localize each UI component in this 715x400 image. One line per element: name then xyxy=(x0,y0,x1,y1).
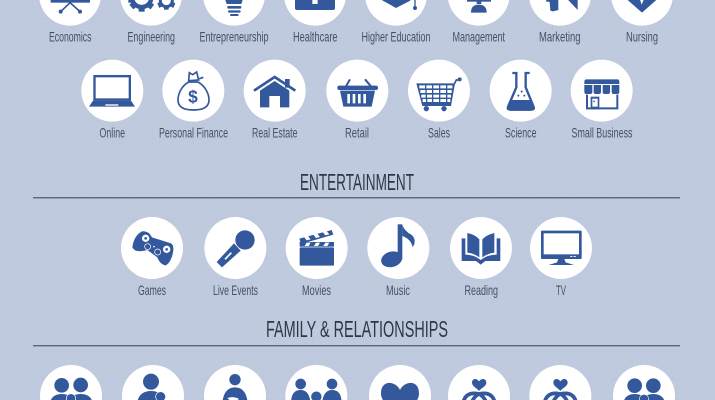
label: Management: Management xyxy=(452,28,505,44)
label: Real Estate: Real Estate xyxy=(252,124,298,140)
icon: Reading open book xyxy=(450,217,512,279)
label: Engineering: Engineering xyxy=(128,28,175,44)
label: Sales: Sales xyxy=(428,124,450,140)
icon: Higher Education cap xyxy=(365,0,427,26)
icon: couple with heart xyxy=(529,365,591,400)
label: Science: Science xyxy=(505,124,537,140)
icon: Personal Finance money bag: $ xyxy=(188,86,198,106)
icon: parents with child xyxy=(613,365,675,400)
label: Nursing: Nursing xyxy=(626,28,658,44)
icon: Retail basket xyxy=(326,60,388,122)
icon: Personal Finance money bag xyxy=(162,60,224,122)
label: Marketing: Marketing xyxy=(539,28,580,44)
icon: Engineering gears xyxy=(120,0,182,26)
label: Games: Games xyxy=(138,282,166,298)
panel: business icons, top row xyxy=(39,0,673,44)
icon: Music note xyxy=(367,217,429,279)
panel: family icons xyxy=(40,365,675,400)
label: Online: Online xyxy=(100,124,125,140)
icon: Online laptop xyxy=(81,60,143,122)
icon: Healthcare case xyxy=(284,0,346,26)
icon: couple with heart xyxy=(448,365,510,400)
icon: TV monitor xyxy=(530,217,592,279)
label: Movies: Movies xyxy=(302,282,331,298)
heading: Family and Relationships: FAMILY & RELATIONSHIPS xyxy=(266,316,448,342)
icon: Live Events microphone xyxy=(204,217,266,279)
icon: Science flask xyxy=(490,60,552,122)
icon: Sales shopping cart xyxy=(408,60,470,122)
label: Entrepreneurship: Entrepreneurship xyxy=(200,28,269,44)
label: Healthcare: Healthcare xyxy=(293,28,338,44)
icon: Marketing megaphone xyxy=(529,0,591,26)
icon: Management person xyxy=(448,0,510,26)
panel: business icons, second row xyxy=(81,60,633,140)
icon: parents with child xyxy=(40,365,102,400)
icon: Games controller xyxy=(121,217,183,279)
heading: Entertainment: ENTERTAINMENT xyxy=(300,169,414,195)
icon: Nursing badge xyxy=(611,0,673,26)
icon: Economics presentation board xyxy=(39,0,101,26)
icon: parent with child xyxy=(122,365,184,400)
icon: Entrepreneurship light bulb xyxy=(203,0,265,26)
label: Music: Music xyxy=(386,282,410,298)
label: TV: TV xyxy=(556,282,566,298)
label: Personal Finance: Personal Finance xyxy=(159,124,228,140)
icon: parent holding baby xyxy=(204,365,266,400)
icon: heart xyxy=(369,365,431,400)
label: Reading: Reading xyxy=(464,282,498,298)
icon: Real Estate house xyxy=(244,60,306,122)
label: Economics: Economics xyxy=(49,28,92,44)
label: Small Business: Small Business xyxy=(572,124,632,140)
label: Higher Education: Higher Education xyxy=(362,28,430,44)
icon: Movies clapperboard xyxy=(286,217,348,279)
panel: entertainment icons xyxy=(121,217,592,298)
icon: family of three xyxy=(285,365,347,400)
label: Retail: Retail xyxy=(345,124,369,140)
icon: Small Business storefront xyxy=(571,60,633,122)
label: Live Events: Live Events xyxy=(213,282,258,298)
